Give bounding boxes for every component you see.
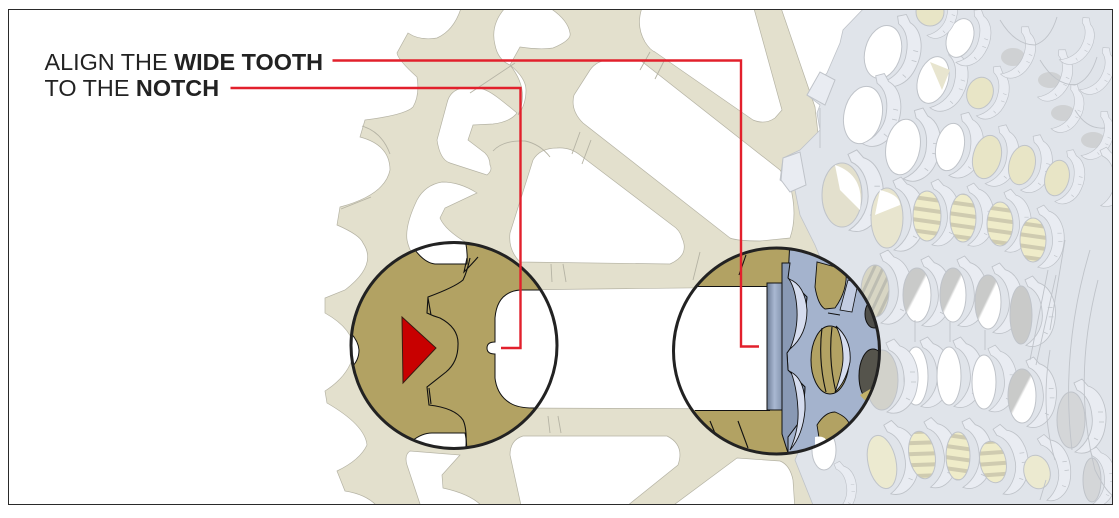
instruction text: TO THE	[44, 75, 136, 101]
instruction text: ALIGN THE WIDE TOOTH	[44, 49, 323, 75]
chainring hole: triangle window	[510, 148, 684, 264]
magnified sprocket plate	[788, 250, 878, 452]
cassette spline tabs	[781, 152, 806, 192]
red triangle marker	[402, 317, 436, 383]
magnified tan pockets	[815, 262, 846, 309]
magnified chainring fill	[353, 244, 538, 446]
magnified window with notch	[486, 290, 556, 408]
magnified tan band top	[698, 250, 789, 286]
chainring hole: bottom left	[406, 450, 480, 504]
magnified left gap	[352, 335, 360, 365]
chainring hole: upper tooth gap	[494, 8, 570, 115]
magnified groove flanges	[789, 279, 807, 349]
chainring hole: central window	[538, 288, 694, 410]
magnified backdrop	[692, 287, 766, 410]
chainring hole: lower trapezoid	[510, 436, 680, 510]
chainring	[325, 5, 830, 510]
leader line: wide tooth	[332, 60, 759, 346]
instruction text: NOTCH	[136, 75, 219, 101]
magnified dark pockets	[858, 348, 878, 394]
chainring strengthening ribs	[341, 52, 700, 433]
chainring hole: upper diagonal window	[573, 60, 794, 241]
chainring hole: top right window	[639, 5, 782, 122]
magnified sprocket shoulder	[782, 263, 807, 453]
chainring hole: lower right	[674, 458, 795, 504]
magnified tan band bottom	[694, 410, 788, 452]
magnifier: wide tooth and notch	[350, 241, 558, 450]
leader line: notch	[230, 88, 520, 348]
cassette	[780, 0, 1119, 513]
magnified bottom gap	[414, 432, 468, 447]
magnified inner flange	[835, 326, 850, 392]
magnified cassette	[692, 250, 878, 452]
magnifier ring 2	[674, 248, 880, 454]
chainring hole: inner gap	[437, 88, 517, 175]
magnified top gap	[416, 244, 468, 264]
chainring hole: lower inner gap	[406, 182, 478, 251]
cassette windows and flanges	[781, 0, 1119, 513]
chainring body	[325, 5, 830, 510]
magnifier: cassette wide tooth	[672, 246, 881, 456]
meshing tooth outline	[427, 257, 478, 447]
cassette body	[780, 5, 1119, 510]
magnified chainring	[352, 244, 540, 447]
magnifier ring 1	[351, 242, 557, 448]
magnified hub strip	[767, 283, 782, 410]
